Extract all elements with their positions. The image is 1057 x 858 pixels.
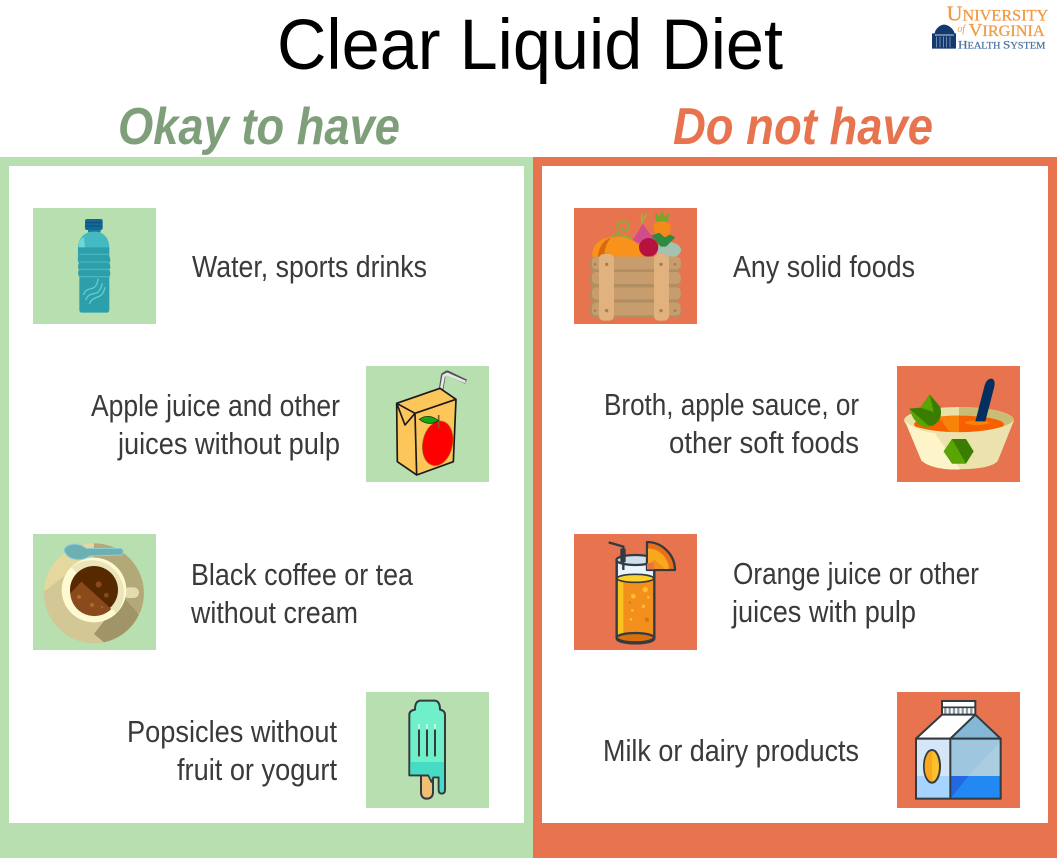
panel: okay to have <box>0 157 533 858</box>
logo: University of Virginia Health System: of <box>957 24 966 35</box>
text: orange juice: juices with pulp <box>731 594 916 629</box>
icon: orange juice <box>574 534 697 650</box>
text: broth: Broth, apple sauce, or <box>604 387 859 422</box>
text: solid foods: Any solid foods <box>733 249 915 284</box>
text: dairy: Milk or dairy products <box>603 733 859 768</box>
icon: milk carton <box>897 692 1020 808</box>
text: apple juice: Apple juice and other <box>91 388 340 423</box>
text: coffee: Black coffee or tea <box>191 557 414 592</box>
text: apple juice: juices without pulp <box>117 426 340 461</box>
icon: bowl of soup <box>897 366 1020 482</box>
text: apple juice <box>91 388 340 461</box>
icon: juice box <box>366 366 489 482</box>
icon: coffee cup <box>33 534 156 650</box>
heading: do not have: Do not have <box>673 98 933 156</box>
panel: do not have <box>533 157 1057 858</box>
heading: okay to have: Okay to have <box>118 98 400 156</box>
logo: University of Virginia Health System: HEALTH SYSTEM <box>958 38 1046 52</box>
logo: University of Virginia Health System: VIRGINIA <box>969 20 1045 40</box>
text: popsicles <box>127 714 337 787</box>
icon: water bottle <box>33 208 156 324</box>
logo: University of Virginia Health System: UNIVERSITY <box>947 4 1048 26</box>
text: orange juice: Orange juice or other <box>733 556 979 591</box>
text: coffee: without cream <box>190 595 358 630</box>
text: broth: other soft foods <box>669 425 859 460</box>
text: broth <box>604 387 859 460</box>
text: popsicles: fruit or yogurt <box>177 752 337 787</box>
logo: University of Virginia Health System <box>932 4 1048 52</box>
text: coffee <box>190 557 414 630</box>
icon: crate of vegetables <box>574 208 697 324</box>
text: orange juice <box>731 556 979 629</box>
text: popsicles: Popsicles without <box>127 714 337 749</box>
text: water: Water, sports drinks <box>192 249 427 284</box>
icon: popsicle <box>366 692 489 808</box>
title: Clear Liquid Diet <box>277 6 783 85</box>
